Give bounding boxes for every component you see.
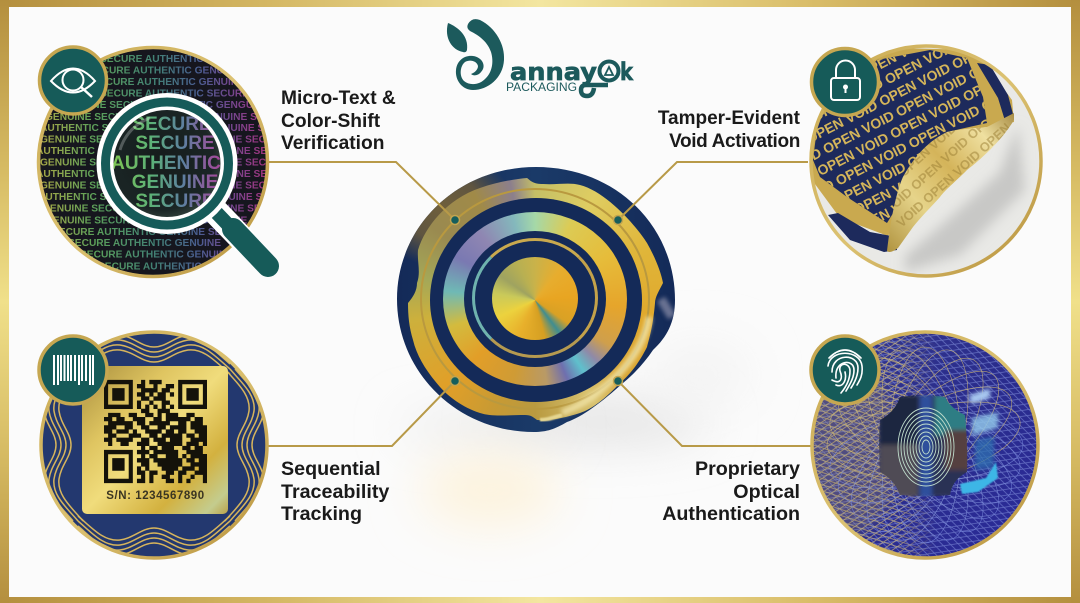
heading: optical: Authentication	[662, 503, 800, 525]
logo	[447, 19, 634, 96]
heading: micro-text	[281, 88, 396, 154]
guilloche hologram	[814, 334, 1036, 556]
logo: packaging: PACKAGING	[506, 82, 577, 94]
badge: fingerprint icon	[811, 336, 879, 404]
seal: iridescent ring	[443, 212, 627, 386]
panel: tamper-evident void	[809, 44, 1043, 278]
micro-text field: SECURE AUTHENTIC GENUINE SECURE	[92, 77, 291, 88]
heading: traceability: Tracking	[281, 503, 362, 525]
magnifying glass: SECURE	[132, 114, 212, 135]
QR code	[104, 382, 207, 481]
void pattern: VOID OPEN VOID OPEN VOID OPEN VOID OPEN	[781, 35, 1075, 196]
magnifying glass: SECURE	[135, 133, 215, 154]
micro-text field: SECURE AUTHENTIC GENUINE	[88, 66, 241, 76]
micro-text field	[40, 49, 266, 275]
seal: foil center	[492, 257, 578, 340]
connector: micro-text	[268, 162, 455, 220]
magnifying glass	[96, 93, 268, 266]
logo: elephant trunk J	[456, 19, 504, 90]
connector: void	[618, 162, 808, 220]
logo: wordmark: annay	[510, 58, 597, 86]
heading: traceability	[281, 458, 390, 525]
serial number: S/N: 1234567890	[106, 490, 205, 502]
micro-text field: SECURE AUTHENTIC SECURE CA	[100, 88, 267, 100]
heading: tamper-evident: Tamper-Evident	[658, 108, 800, 129]
heading: traceability: Traceability	[281, 480, 389, 502]
micro-text field: SECURE AUTHENTIC GENUINE	[80, 250, 233, 260]
micro-text field: GENUINE SECURE AUTHENTIC GENUINE SECURE	[45, 112, 293, 123]
void pattern	[813, 50, 987, 223]
peeled corner: VOID OPEN VOID OPEN	[893, 120, 1014, 230]
gold foil square	[82, 366, 228, 514]
badge: padlock icon	[812, 48, 878, 116]
badge: barcode icon	[39, 336, 107, 404]
micro-text field: AUTHENTIC SECURE AUTHENTIC GENUINE SECUREAR	[36, 146, 311, 157]
peeled corner: VOID OPEN VOID OPEN	[869, 93, 989, 203]
logo: recycling o	[581, 62, 618, 96]
seal: navy base	[397, 167, 675, 432]
micro-text field: SECURE AUTHENTIC GENUINE	[68, 238, 221, 249]
micro-text field: SECURE AUTHENTIC GENUINE	[100, 54, 253, 65]
heading: tamper-evident	[658, 108, 800, 152]
peeled label scene	[810, 45, 1044, 279]
heading: micro-text: Color-Shift	[281, 110, 380, 132]
micro-text field: SECURE AUTHENTIC GENUINE	[98, 262, 251, 272]
panel: traceability QR	[39, 332, 270, 562]
connector: optical	[618, 381, 811, 446]
panel: proprietary optical	[790, 332, 1039, 558]
micro-text field: AUTHENTIC SECURE AUTHENTIC GENUINE SECURE CA	[40, 123, 318, 134]
void pattern: VOID OPEN VOID OPEN VOID OPEN VOID OPEN	[770, 3, 1064, 164]
peeled corner: VOID OPEN VOID OPEN	[881, 107, 1001, 217]
logo: leaf	[447, 23, 467, 52]
heading: optical: Proprietary	[695, 458, 800, 480]
seal: wavy outer foil band	[408, 178, 663, 420]
central fingerprint window	[878, 388, 998, 497]
micro-text field: GENUINE SECURE AUTHENTIC GENGUIBE	[60, 100, 270, 111]
micro-text field: GENUINE SECURE AUTHENTIC GENUINE SECURE RIE	[42, 204, 310, 214]
central hologram seal	[397, 167, 675, 432]
badge: eye icon	[40, 47, 106, 114]
void pattern: VOID OPEN VOID OPEN VOID OPEN VOID OPEN	[786, 13, 1080, 174]
micro-text field: GENUINE SECURE AUTHENTIC GENUINE SECURE	[45, 216, 293, 226]
heading: tamper-evident: Void Activation	[669, 130, 800, 152]
guilloche background	[40, 332, 270, 562]
seal: inner thin ring	[472, 238, 598, 358]
magnifying glass: GENUINE	[132, 172, 218, 193]
micro-text field: SECURE AUTHENTIC GENUINE SECURE	[52, 227, 251, 238]
magnifying glass: SECURE	[135, 191, 215, 212]
panel: micro-text verification	[36, 45, 279, 278]
heading: optical	[662, 458, 800, 525]
micro-text field: GENUINE SECURE AUTHENTIC GENUINE SECURE SECU	[40, 158, 319, 168]
seal: inner navy ring	[464, 231, 606, 367]
micro-text field: AUTHENTIC SECURE AUTHENTIC GENUINE SECURERAR	[36, 169, 319, 180]
micro-text field: AUTHENTIC SECURE AUTHENTIC GENUINE SECURE AG	[38, 192, 316, 203]
micro-text field: GENUINE SECURE AUTHENTIC GENUINE SECURE SEC	[40, 180, 312, 192]
connector: traceability	[268, 381, 455, 446]
heading: optical: Optical	[733, 480, 800, 502]
logo: k	[620, 58, 634, 86]
heading: micro-text: Micro-Text &	[281, 88, 396, 109]
heading: micro-text: Verification	[281, 133, 384, 154]
seal: navy ring	[430, 198, 642, 402]
gold edge foil	[812, 48, 1014, 236]
heading: traceability: Sequential	[281, 458, 381, 480]
micro-text field: GENUINE SECURE AUTHENTIC GENUINE SECURE SUPEC	[40, 134, 326, 146]
navy edge fragments	[977, 63, 1013, 118]
seal: thin gold ring and peel highlights	[420, 188, 674, 422]
magnifying glass: AUTHENTIC	[111, 153, 221, 174]
